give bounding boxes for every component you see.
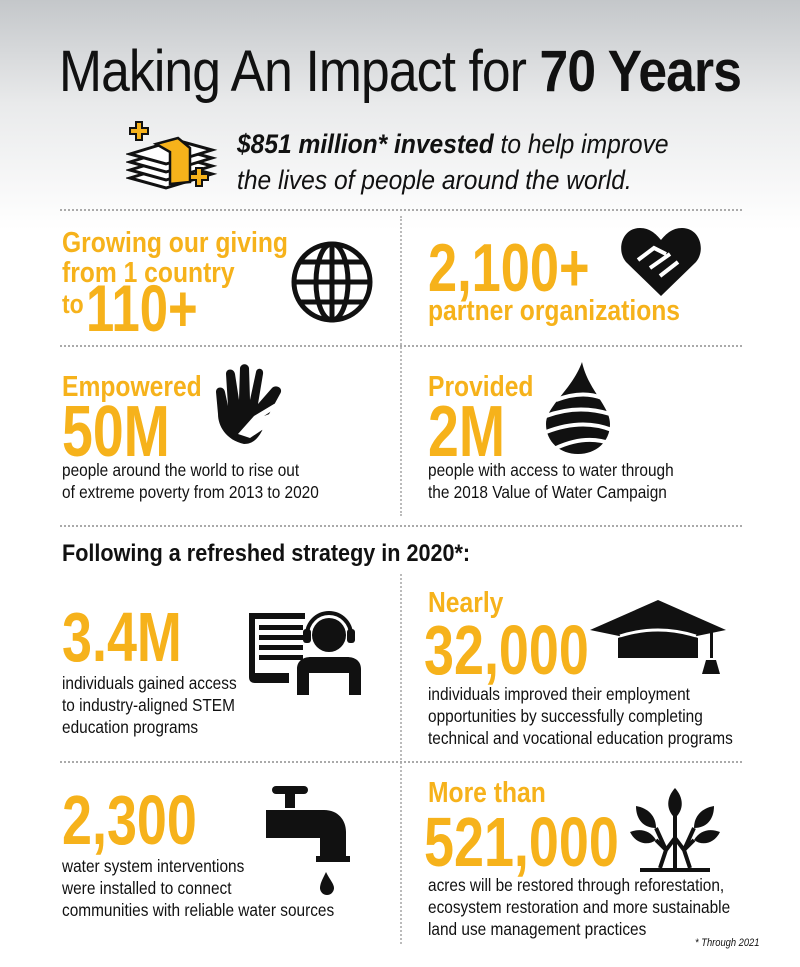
panel: empowered: Empowered [62, 371, 202, 403]
icon: hands [216, 364, 282, 444]
panel: countries: Growing our giving [62, 227, 288, 259]
icon: computer learner [249, 611, 361, 695]
icon: heart hands [621, 228, 701, 296]
section heading: Following a refreshed strategy in 2020*: [62, 540, 470, 567]
panel: acres: acres will be restored through reforestation, [428, 875, 724, 895]
intro text: the lives of people around the world. [237, 165, 632, 195]
icon: faucet [266, 786, 350, 895]
panel: water systems: communities with reliable water sources [62, 900, 334, 920]
icon: money stack [126, 121, 218, 190]
panel: countries: to [62, 289, 84, 319]
panel: empowered: people around the world to rise out [62, 460, 299, 480]
footnote: * Through 2021 [695, 937, 759, 949]
icon: striped drop [546, 362, 610, 454]
panel: empowered: 50M [62, 392, 170, 472]
panel: water systems [62, 781, 350, 920]
panel: acres [424, 777, 730, 939]
intro text: $851 million* invested to help improve [237, 129, 669, 159]
panel: acres: ecosystem restoration and more sustainable [428, 897, 730, 917]
panel: water systems: 2,300 [62, 781, 197, 859]
panel: partners: 2,100+ [428, 230, 590, 306]
icon: globe [292, 242, 372, 322]
panel: STEM: 3.4M [62, 598, 182, 676]
panel: STEM [62, 598, 361, 737]
icon: graduation cap [590, 600, 726, 674]
title: Making An Impact for 70 Years [59, 39, 741, 104]
panel: water systems: water system interventions [62, 856, 244, 876]
panel: STEM: individuals gained access [62, 673, 237, 693]
panel: vocational [424, 587, 733, 748]
panel: vocational: 32,000 [424, 611, 589, 689]
panel: countries: from 1 country [62, 257, 235, 289]
panel: empowered: of extreme poverty from 2013 to 2020 [62, 482, 319, 502]
panel: empowered [62, 364, 319, 502]
panel: partners: partner organizations [428, 295, 680, 327]
panel: STEM: to industry-aligned STEM [62, 695, 235, 715]
panel: countries: 110+ [86, 271, 198, 345]
panel: STEM: education programs [62, 717, 198, 737]
panel: vocational: opportunities by successfully completing [428, 706, 703, 726]
intro text [236, 129, 669, 195]
panel: vocational: Nearly [428, 587, 503, 619]
panel: water provided: the 2018 Value of Water Campaign [428, 482, 667, 502]
panel: water provided: Provided [428, 371, 533, 403]
panel: countries [62, 227, 372, 345]
panel: acres: 521,000 [424, 803, 619, 881]
icon: plant [630, 788, 720, 872]
panel: acres: land use management practices [428, 919, 646, 939]
panel: partners [428, 228, 701, 327]
panel: vocational: individuals improved their employment [428, 684, 690, 704]
panel: water provided: 2M [428, 392, 505, 472]
panel: acres: More than [428, 777, 546, 809]
panel: water systems: were installed to connect [62, 878, 232, 898]
panel: water provided: people with access to water through [428, 460, 674, 480]
panel: water provided [428, 362, 674, 502]
panel: vocational: technical and vocational education programs [428, 728, 733, 748]
